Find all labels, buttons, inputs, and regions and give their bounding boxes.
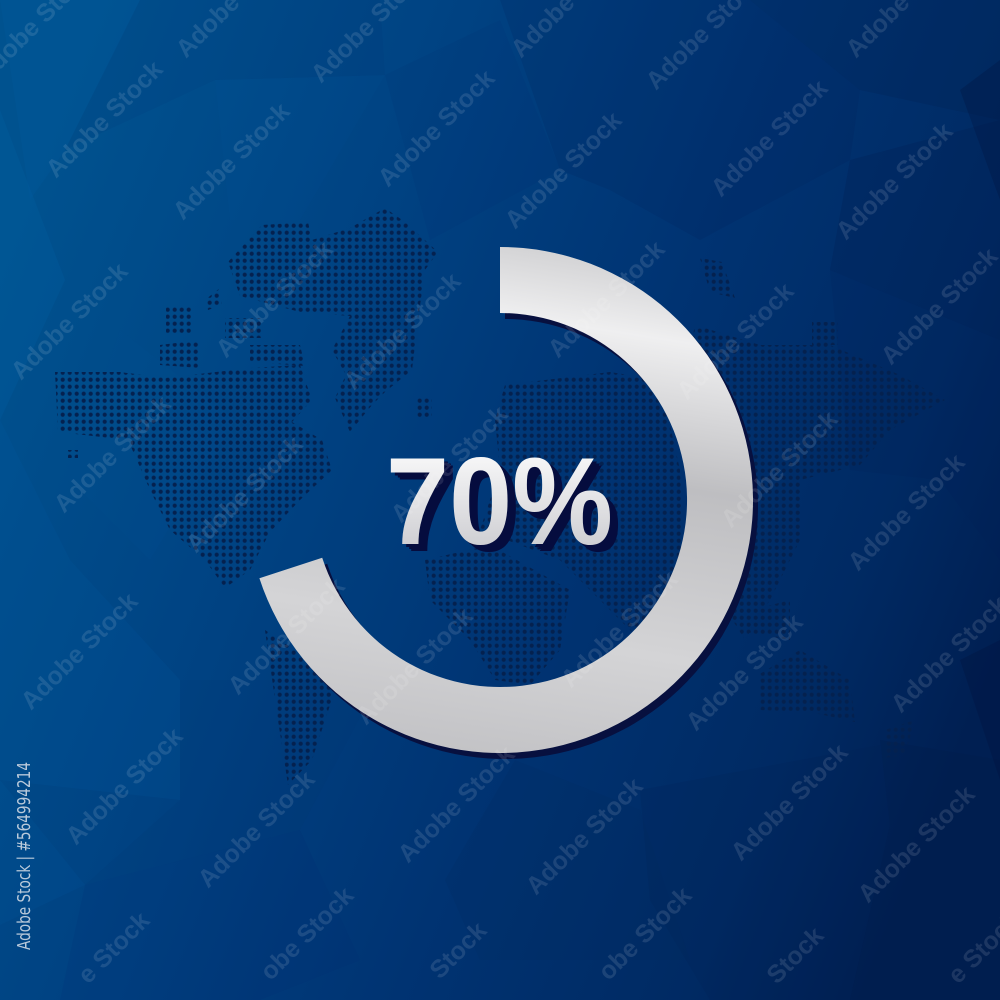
repeated diagonal watermark: Adobe Stock [499,106,627,234]
ring shadow [264,253,758,759]
repeated diagonal watermark: Adobe Stock [385,400,513,528]
repeated diagonal watermark: Adobe Stock [875,242,1000,370]
repeated diagonal watermark: Adobe Stock [192,765,320,893]
repeated diagonal watermark: Adobe Stock [222,572,350,700]
repeated diagonal watermark: Adobe Stock [705,74,833,202]
repeated diagonal watermark: obe Stock [255,881,359,986]
repeated diagonal watermark: Adobe Stock [725,738,853,866]
repeated diagonal watermark: e Stock [73,906,155,989]
repeated diagonal watermark: Adobe Stock [338,267,466,395]
repeated diagonal watermark: Adobe Stock [852,780,980,908]
label extruded shadow: 70% [395,440,621,578]
repeated diagonal watermark: Adobe Stock [842,448,970,576]
repeated diagonal watermark: Adobe Stock [48,390,176,518]
repeated diagonal watermark: Adobe Stock [60,722,188,850]
repeated diagonal watermark: Adobe Stock [680,608,808,736]
repeated diagonal watermark: Adobe Stock [830,117,958,245]
repeated diagonal watermark: Adobe Stock [520,772,648,900]
stock id caption: Adobe Stock | #564994214 [14,762,35,950]
repeated diagonal watermark: Adobe Stock [555,565,683,693]
repeated diagonal watermark: Adobe Stock [40,55,168,183]
label face: 70% [386,433,613,571]
world map of dots [40,200,960,800]
repeated diagonal watermark: Adobe Stock [210,235,338,363]
label extruded shadow: 70% [393,438,619,576]
progress ring: 70% [259,247,753,753]
repeated diagonal watermark: Adobe Stock [715,405,843,533]
repeated diagonal watermark: obe Stock [593,881,697,986]
repeated diagonal watermark: Adobe Stock [167,97,295,225]
repeated diagonal watermark: Adobe Stock [15,587,143,715]
repeated diagonal watermark: Stock [424,916,492,984]
repeated diagonal watermark: Adobe Stock [5,257,133,385]
repeated diagonal watermark: Adobe Stock [671,277,799,405]
repeated diagonal watermark: Adobe Stock [180,430,308,558]
repeated diagonal watermark: Adobe Stock [372,64,500,192]
repeated diagonal watermark: Adobe Stock [392,740,520,868]
repeated diagonal watermark: Stock [761,921,829,989]
repeated diagonal watermark: Adobe Stock [542,235,670,363]
repeated diagonal watermark: Adobe Stock [350,602,478,730]
label extruded shadow: 70% [390,436,616,574]
percentage label [386,433,621,578]
